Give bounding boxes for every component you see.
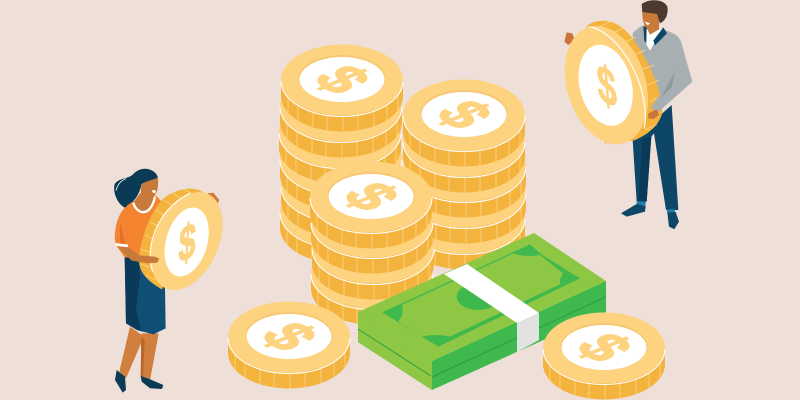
- woman holding coin: [114, 169, 237, 393]
- big coin white centre: [157, 202, 216, 282]
- smile: [152, 190, 156, 193]
- paper band: [444, 264, 539, 323]
- coin stack: back right: [403, 80, 526, 269]
- cash bundle: [358, 233, 606, 390]
- neck: [133, 190, 155, 212]
- bundle sides: [358, 281, 606, 390]
- neck and face: [642, 12, 660, 35]
- left hand: [564, 32, 575, 45]
- print inner field: [398, 253, 563, 337]
- coin stack: back left: [279, 44, 403, 263]
- centre seal: [457, 283, 500, 310]
- man holding coin: [551, 0, 692, 229]
- sleeve cuff: [115, 243, 128, 247]
- socks: [637, 201, 675, 213]
- bundle top face: [358, 233, 606, 361]
- shoes: [621, 204, 679, 229]
- big coin face: [551, 15, 662, 155]
- big coin white centre: [570, 39, 641, 132]
- loose coin: left: [228, 302, 350, 388]
- sweater: [633, 25, 692, 113]
- print frame: [382, 244, 580, 347]
- shirt: [646, 29, 662, 51]
- head: [141, 178, 158, 203]
- collar: [643, 26, 667, 45]
- hair: [642, 0, 668, 23]
- neckline: [133, 197, 155, 212]
- legs: [119, 327, 159, 381]
- big coin face: [136, 181, 237, 301]
- big coin edge: [587, 21, 662, 143]
- forearm over coin: [651, 74, 692, 113]
- dollar sign: $: [595, 51, 619, 120]
- shoes: [115, 370, 163, 393]
- coin stack: front: [310, 162, 434, 324]
- loose coin: right: [543, 312, 665, 399]
- skirt: [125, 257, 166, 334]
- trousers: [633, 105, 678, 210]
- hand behind coin: [207, 193, 219, 205]
- right hand: [648, 109, 659, 119]
- hair highlight: [116, 179, 126, 191]
- big coin edge: [139, 189, 203, 289]
- hair: [114, 169, 158, 208]
- dollar sign: $: [177, 211, 198, 275]
- arm and hand: [117, 246, 159, 263]
- note print: [382, 244, 580, 347]
- orange top: [115, 196, 163, 257]
